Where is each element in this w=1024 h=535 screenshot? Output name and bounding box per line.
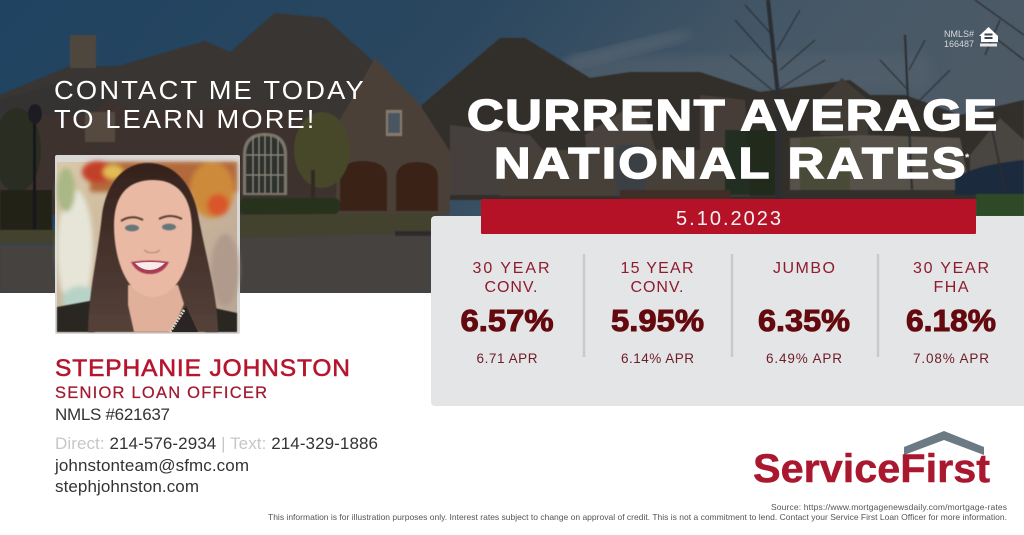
rate: 15 year conv: 15 YEAR <box>620 260 694 277</box>
nose shading <box>144 250 160 253</box>
painted background <box>57 161 239 314</box>
arched window <box>243 133 287 195</box>
contact block <box>54 355 378 496</box>
NMLS and equal housing mark: NMLS# <box>944 29 975 40</box>
main heading <box>467 91 997 188</box>
rate: jumbo: JUMBO <box>773 260 835 277</box>
hair <box>88 163 218 332</box>
rate: 30 year fha: 30 YEAR <box>913 260 989 277</box>
right side shrubs and car <box>620 190 730 200</box>
rate: 15 year conv: CONV. <box>630 279 684 296</box>
rates panel <box>431 199 1024 406</box>
NMLS id: NMLS #621637 <box>55 405 170 424</box>
road <box>0 233 431 293</box>
date banner: 5.10.2023 <box>676 208 781 230</box>
rate: 30 year conv: 6.71 APR <box>476 351 538 366</box>
heading: contact me <box>54 76 364 134</box>
garage doors <box>340 161 387 211</box>
source and disclaimer: This information is for illustration purposes only. Interest rates subject to change on approval of credit. This is not a commitment to lend. Contact your Service First Loan Officer for more information. <box>268 512 1007 522</box>
neck and chest <box>128 285 184 332</box>
far right houses <box>422 38 1024 200</box>
rate: 30 year fha: 6.18% <box>906 303 996 338</box>
shrubs <box>240 198 340 214</box>
main heading: NATIONAL RATES <box>494 139 965 188</box>
shirt collar right <box>170 306 198 332</box>
face <box>114 180 192 297</box>
heading: contact me: CONTACT ME TODAY <box>54 76 364 105</box>
logo: Service First: ServiceFirst <box>753 447 990 491</box>
rate: 30 year fha: FHA <box>934 279 969 296</box>
heading: contact me: TO LEARN MORE! <box>54 105 314 134</box>
job title: SENIOR LOAN OFFICER <box>55 384 267 402</box>
rate: 30 year fha <box>906 260 996 366</box>
rate: 30 year conv: CONV. <box>484 279 538 296</box>
rate: jumbo: 6.49% APR <box>766 351 842 366</box>
name: STEPHANIE JOHNSTON <box>55 355 350 382</box>
rate: 30 year conv: 30 YEAR <box>472 260 550 277</box>
left house <box>0 13 450 215</box>
necklace <box>170 310 184 332</box>
eyes and brows <box>121 216 182 231</box>
lawn <box>240 213 440 238</box>
smile <box>131 260 169 274</box>
icon: equal housing <box>979 27 998 46</box>
email: johnstonteam@sfmc.com <box>54 456 249 475</box>
date banner <box>481 199 976 234</box>
tree by house <box>294 112 350 188</box>
shirt <box>57 300 237 332</box>
source and disclaimer <box>268 502 1007 522</box>
rate: 30 year fha: 7.08% APR <box>913 351 989 366</box>
NMLS and equal housing mark <box>944 27 998 50</box>
background photo: houses at dusk <box>0 0 1024 293</box>
rate: 15 year conv: 5.95% <box>611 303 704 338</box>
rate: 30 year conv <box>460 260 554 366</box>
website: stephjohnston.com <box>55 477 199 496</box>
main heading: CURRENT AVERAGE <box>467 91 997 140</box>
rate: jumbo: 6.35% <box>758 303 850 338</box>
left trees and lamp post <box>0 108 41 192</box>
upper window <box>386 110 402 136</box>
phone numbers: Direct: 214-576-2934 | Text: 214-329-1886 <box>55 434 378 453</box>
bare trees <box>730 0 1024 200</box>
rate: jumbo <box>758 260 850 366</box>
white lower background <box>0 293 431 535</box>
icon: roof <box>904 431 984 455</box>
rate: 30 year conv: 6.57% <box>460 303 554 338</box>
dividers <box>584 254 878 357</box>
main heading: * <box>965 152 970 164</box>
rate: 15 year conv: 6.14% APR <box>621 351 694 366</box>
rate: 15 year conv <box>611 260 704 366</box>
portrait photo <box>55 155 240 334</box>
NMLS and equal housing mark: 166487 <box>944 39 974 50</box>
source and disclaimer: Source: https://www.mortgagenewsdaily.com/mortgage-rates <box>771 502 1007 512</box>
